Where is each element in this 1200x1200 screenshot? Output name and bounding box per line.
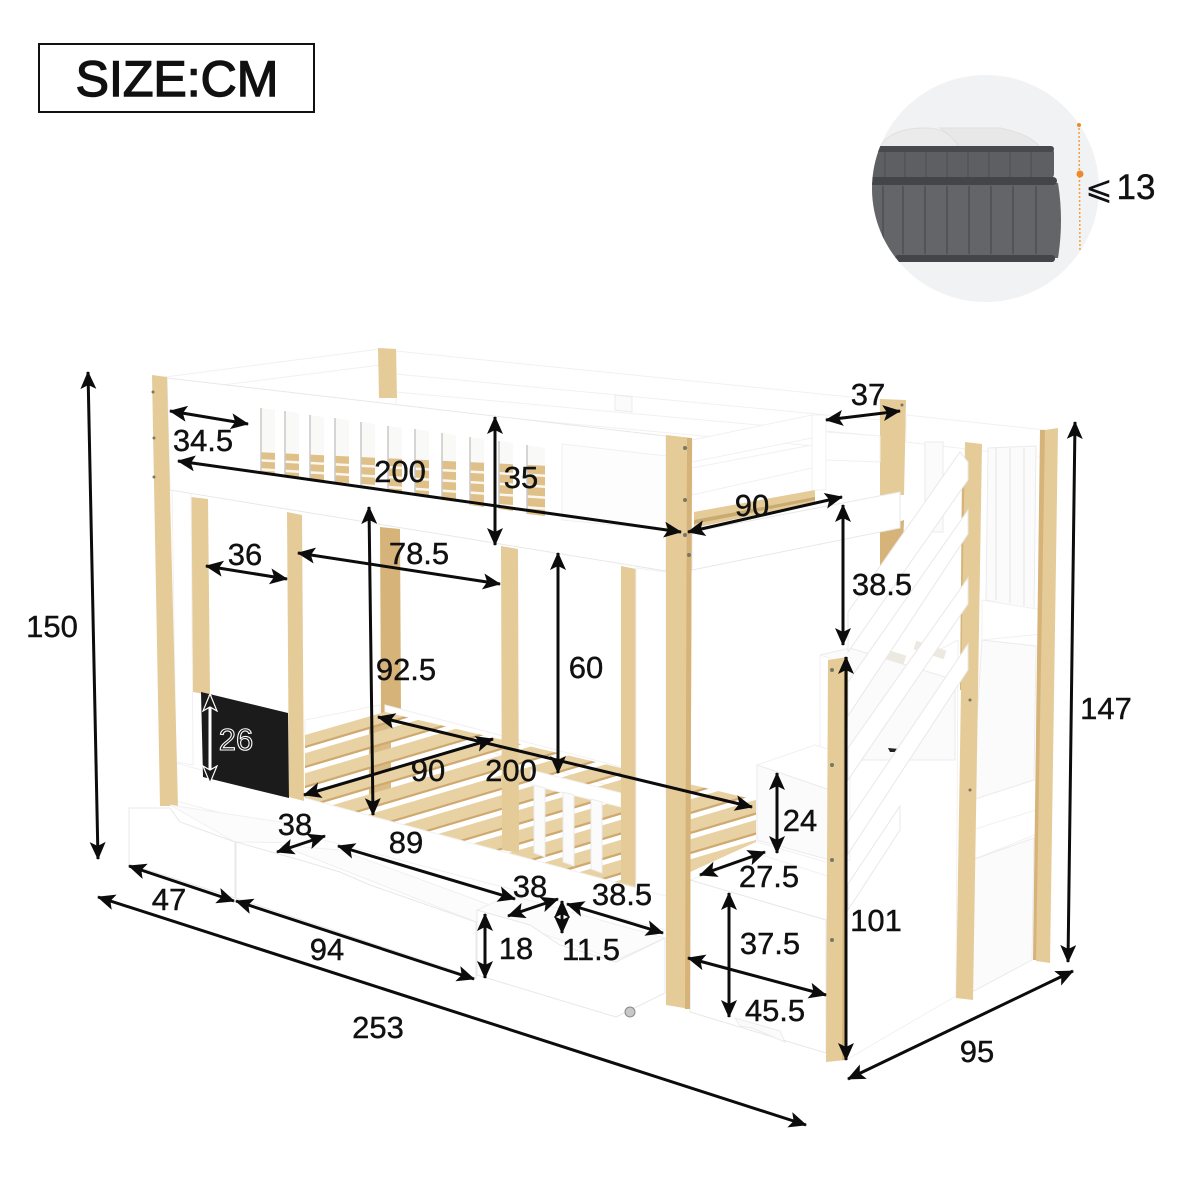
- dimension: lower step depth 27.5: 27.5: [739, 859, 799, 894]
- upper front guard panel: [167, 378, 666, 571]
- dimension: handle 38: [277, 807, 325, 852]
- icon: caster: [625, 1007, 635, 1017]
- dimension: guard 34.5: 34.5: [173, 423, 233, 458]
- dimension: lower length 200: 200: [485, 753, 537, 788]
- dimension: lower step 37.5: 37.5: [740, 926, 800, 961]
- front guard panel inset: [562, 444, 666, 530]
- dimension: total width 95: [848, 971, 1073, 1079]
- middle stair step: [757, 745, 900, 862]
- guard bar edges: [261, 408, 527, 514]
- front right post: [666, 435, 692, 1009]
- dimension: lower step 37.5: [729, 893, 800, 1017]
- dimension: upper length 200: 200: [374, 454, 426, 489]
- upper bunk side slats: [694, 490, 815, 528]
- stair front post: [826, 657, 848, 1062]
- dimension: stair height 147: [1068, 422, 1132, 962]
- stair rear post thin: [1033, 430, 1047, 960]
- dimension: right drawer 38.5: 38.5: [592, 877, 652, 912]
- dimension: total width 95: 95: [960, 1034, 994, 1069]
- stair side panel: [846, 640, 958, 1060]
- dimension: step rise 24: [777, 773, 817, 853]
- dimension: underside 92.5: 92.5: [376, 652, 436, 687]
- dimension: drawer inner 89: 89: [389, 825, 423, 860]
- chalkboard: [201, 692, 289, 798]
- back left post upper: [378, 348, 397, 398]
- drawer left: [129, 805, 320, 898]
- back left post lower: [380, 527, 401, 716]
- dimension: drawer inner 89: [338, 825, 515, 899]
- dimension: drawer height 18: [485, 914, 533, 978]
- panel: mattress thickness inset: [868, 75, 1155, 302]
- dimension: opening 36: [206, 537, 287, 579]
- dimension: guard 34.5: [170, 411, 248, 458]
- upper right side guard: [692, 415, 880, 495]
- dimension: handle 38: 38: [278, 807, 312, 842]
- dimension: lower step depth 27.5: [700, 852, 799, 894]
- guard openings with upper slats: [262, 452, 545, 516]
- dimension: upper clearance 38.5: 38.5: [852, 567, 912, 602]
- dimension: step rise 24: 24: [783, 803, 817, 838]
- dimension: total length 253: [98, 897, 806, 1125]
- front left post: [152, 375, 178, 806]
- stair tower back: [906, 415, 1045, 992]
- dimension: drawer 47: 47: [152, 882, 186, 917]
- upper right side board: [692, 492, 900, 570]
- dimension: chalkboard 26: [210, 695, 253, 782]
- dimension: right drawer 38: [508, 869, 558, 916]
- dimension: opening 78.5: [298, 536, 500, 584]
- label: mattress max thickness: ⩽: [1085, 168, 1113, 207]
- panel: bunk bed illustration: [129, 348, 1058, 1062]
- dimension: total height 150: 150: [26, 609, 78, 644]
- lower bunk back rails: [305, 705, 625, 790]
- back right post: [880, 399, 906, 582]
- dimension: guard height 35: 35: [504, 460, 538, 495]
- lower bunk slats: [305, 712, 756, 888]
- dimension: drawer 94: [236, 901, 474, 979]
- dimension: right drawer 38.5: [567, 877, 663, 933]
- lower stair drawer: [690, 855, 840, 1053]
- dimension: entry 37: [826, 377, 900, 420]
- label: mattress max thickness: [1085, 168, 1155, 207]
- dimension: lower width 90: 90: [411, 753, 445, 788]
- dimension: entry 37: 37: [851, 377, 885, 412]
- dimension: drawer 47: [129, 866, 234, 917]
- dimension: opening 78.5: 78.5: [389, 536, 449, 571]
- dimension: drawer height 18: 18: [499, 931, 533, 966]
- upper stair step: [820, 645, 955, 760]
- dimension: lower step 45.5: 45.5: [745, 993, 805, 1028]
- dimension: lower step 45.5: [688, 958, 826, 1028]
- dimension: chalkboard 26: 26: [219, 722, 253, 757]
- title: size unit box: [39, 44, 314, 112]
- dimension: underside 92.5: [369, 507, 436, 815]
- icon: mattress: [868, 128, 1061, 262]
- dimension: lower length 200: [378, 717, 752, 807]
- dimension: total length 253: 253: [352, 1010, 404, 1045]
- dimension: right drawer 11.5: 11.5: [562, 932, 620, 967]
- dimension: upper width 90: [688, 488, 842, 532]
- back and side top rails: [165, 349, 880, 452]
- stair main post: [956, 442, 982, 1000]
- dimension: stair front post 101: 101: [850, 903, 902, 938]
- dimension: opening 36: 36: [228, 537, 262, 572]
- dimension: total height 150: [26, 372, 98, 859]
- dimension: guard to underside 60: 60: [569, 650, 603, 685]
- dimension: lower width 90: [304, 739, 493, 795]
- label: mattress max thickness: 13: [1117, 168, 1155, 207]
- stair railings: [848, 452, 968, 910]
- drawer middle: [236, 842, 490, 978]
- inner posts: [191, 497, 636, 886]
- lower bunk guard: [531, 770, 621, 873]
- lower front rail: [172, 762, 666, 930]
- dimension: stair height 147: 147: [1080, 691, 1132, 726]
- white side panels: [172, 485, 666, 896]
- dimension: right drawer 38: 38: [513, 869, 547, 904]
- dimension: upper clearance 38.5: [843, 505, 912, 645]
- dotted measure line: [1076, 123, 1084, 252]
- title: size unit box: SIZE:CM: [76, 51, 278, 107]
- drawer right: [477, 895, 665, 1017]
- stair rear post: [1036, 428, 1058, 963]
- dimension: upper length 200: [178, 454, 681, 532]
- dimension: drawer 94: 94: [310, 932, 344, 967]
- dimension: guard height 35: [495, 417, 538, 545]
- dimension: right drawer 11.5: [562, 901, 620, 967]
- bolts: [152, 390, 972, 942]
- dimension: upper width 90: 90: [735, 488, 769, 523]
